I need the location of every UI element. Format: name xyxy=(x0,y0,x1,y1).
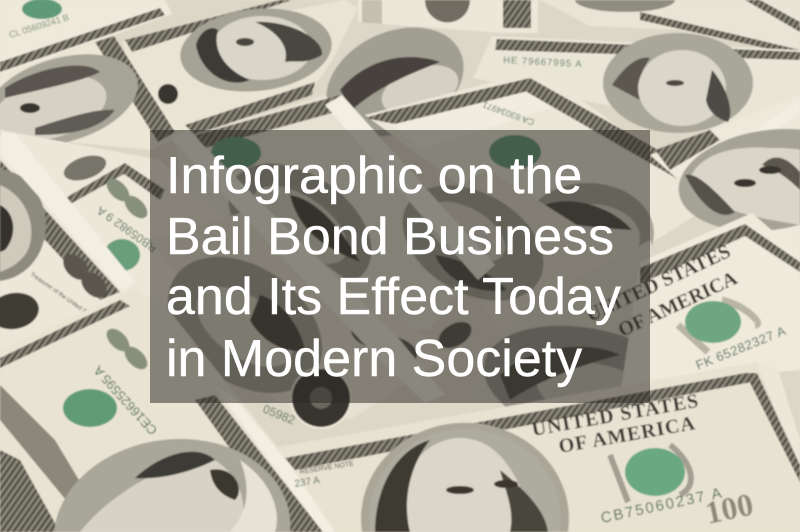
bill: left stack with seals: Treasurer of the United States xyxy=(29,272,98,323)
bill: serial FK 65282327 A: UNITED STATES xyxy=(583,240,734,327)
bill: bottom with large portrait and seal: 237 A xyxy=(294,475,321,490)
bill: left stack with seals: BB05982 9 A xyxy=(94,203,160,255)
title xyxy=(166,147,621,388)
bill: lower centre-left portrait xyxy=(142,210,476,421)
bill: top portrait xyxy=(122,0,358,140)
bill: bottom with large portrait and seal: CB75060237 A xyxy=(599,484,725,527)
bill: top centre xyxy=(358,0,538,33)
title: and Its Effect Today xyxy=(166,268,621,326)
bill: lower right of centre portrait xyxy=(470,240,707,462)
bill: right portrait xyxy=(650,95,800,260)
bill: top right xyxy=(540,0,800,60)
bill: bottom with large portrait and seal: OF AMERICA xyxy=(557,412,697,458)
bill: left stack with seals xyxy=(0,130,340,405)
bill: centre portrait band xyxy=(382,162,640,340)
white bill edges under the title panel xyxy=(172,95,495,403)
bill: serial HE 79667995 A: HE 79667995 A xyxy=(503,55,583,70)
bill: bottom left portrait: CE16625595 A xyxy=(90,363,160,438)
translucent dark title panel xyxy=(150,130,650,403)
bill: upper left centre xyxy=(175,95,480,340)
title: Bail Bond Business xyxy=(166,208,614,266)
bill: upper middle portrait xyxy=(309,6,540,158)
bill: black seal: 05982 xyxy=(261,402,297,427)
bill: bottom left portrait xyxy=(0,288,345,532)
bill: bottom with large portrait and seal: UNITED STATES xyxy=(530,390,701,441)
title: Infographic on the xyxy=(166,147,582,205)
title: in Modern Society xyxy=(166,330,582,388)
bill: serial FK 65282327 A: FK 65282327 A xyxy=(694,323,788,373)
bill: serial FK 65282327 A xyxy=(583,213,800,395)
bill: top left: CL 05609241 B xyxy=(8,12,70,40)
bill: main centre: CA 83034971 xyxy=(481,99,536,128)
bill: top left xyxy=(0,0,172,76)
bill: bottom with large portrait and seal: 100 xyxy=(702,486,756,531)
bill: left portrait xyxy=(0,36,182,162)
bill: serial HE 79667995 A xyxy=(473,33,800,135)
bill: black seal xyxy=(261,367,352,429)
bill: bottom with large portrait and seal xyxy=(278,360,800,532)
bill: bottom with large portrait and seal: RESERVE NOTE xyxy=(299,460,355,476)
bill: main centre xyxy=(365,70,720,300)
bill: serial FK 65282327 A: OF AMERICA xyxy=(615,267,741,342)
